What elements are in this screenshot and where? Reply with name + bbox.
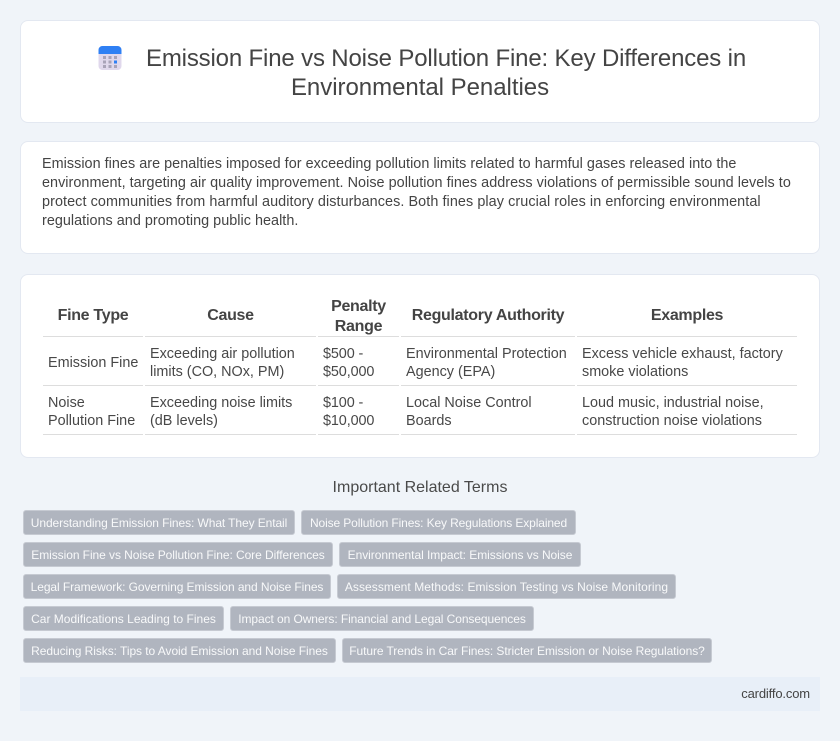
row: noise pollution fine <box>48 395 764 429</box>
comparison table <box>43 298 797 435</box>
row: emission fine: $500 - <box>323 346 363 362</box>
row: noise pollution fine: Exceeding noise limits <box>150 395 292 411</box>
icon: calendar <box>98 46 122 70</box>
header: fine type: Fine Type <box>58 307 128 324</box>
header: regulatory authority: Regulatory Authority <box>412 307 564 324</box>
row: noise pollution fine: Boards <box>406 413 452 429</box>
tag <box>23 510 295 535</box>
row: emission fine: Exceeding air pollution <box>150 346 295 362</box>
description text: environment, targeting air quality improvement. Noise pollution fines address violations of permissible sound levels to <box>42 175 791 191</box>
tag <box>337 574 676 599</box>
row: emission fine: Environmental Protection <box>406 346 567 362</box>
row: noise pollution fine: (dB levels) <box>150 413 218 429</box>
tag <box>230 606 534 631</box>
panel: comparison table <box>20 274 820 458</box>
tag: Impact on Owners: Financial and Legal Consequences <box>238 612 526 626</box>
row: emission fine <box>48 346 783 380</box>
row: emission fine: Excess vehicle exhaust, factory <box>582 346 783 362</box>
row: noise pollution fine: Noise <box>48 395 85 411</box>
tag: Legal Framework: Governing Emission and Noise Fines <box>31 580 323 594</box>
header: examples: Examples <box>651 307 723 324</box>
row: noise pollution fine: Pollution Fine <box>48 413 135 429</box>
tag <box>339 542 581 567</box>
row: emission fine: limits (CO, NOx, PM) <box>150 364 284 380</box>
row: emission fine: Emission Fine <box>48 355 138 371</box>
tag: Environmental Impact: Emissions vs Noise <box>348 548 572 562</box>
header: penalty range: Range <box>335 318 382 334</box>
tag: Emission Fine vs Noise Pollution Fine: Core Differences <box>31 548 325 562</box>
tag <box>23 574 331 599</box>
tag: Assessment Methods: Emission Testing vs Noise Monitoring <box>345 580 668 594</box>
row: emission fine: smoke violations <box>582 364 688 380</box>
row: noise pollution fine: Local Noise Control <box>406 395 532 411</box>
heading: related terms: Important Related Terms <box>333 479 507 496</box>
panel: title header <box>20 20 820 123</box>
tag: Future Trends in Car Fines: Stricter Emission or Noise Regulations? <box>349 644 705 658</box>
footer bar <box>20 677 820 711</box>
row: noise pollution fine: Loud music, industrial noise, <box>582 395 764 411</box>
row: emission fine: Agency (EPA) <box>406 364 495 380</box>
description text: regulations and promoting public health. <box>42 213 298 229</box>
description text: Emission fines are penalties imposed for exceeding pollution limits related to harmful gases released into the <box>42 156 736 172</box>
footer source: cardiffo.com <box>741 686 810 701</box>
row: emission fine: $50,000 <box>323 364 374 380</box>
panel: description <box>20 141 820 254</box>
tag <box>301 510 576 535</box>
header: penalty range: Penalty <box>331 298 386 315</box>
description text: protect communities from harmful auditory disturbances. Both fines play crucial roles in enforcing environmental <box>42 194 761 210</box>
tag: Understanding Emission Fines: What They Entail <box>31 516 287 530</box>
row: noise pollution fine: $10,000 <box>323 413 374 429</box>
tag <box>23 542 333 567</box>
title: Emission Fine vs Noise Pollution Fine: Key Differences in <box>146 45 746 72</box>
tag: Reducing Risks: Tips to Avoid Emission and Noise Fines <box>31 644 328 658</box>
header: cause: Cause <box>207 307 254 324</box>
description text <box>42 156 791 229</box>
tag: Car Modifications Leading to Fines <box>31 612 216 626</box>
row: noise pollution fine: $100 - <box>323 395 363 411</box>
tag list: related terms <box>23 510 712 663</box>
tag: Noise Pollution Fines: Key Regulations Explained <box>310 516 567 530</box>
tag <box>23 606 224 631</box>
tag <box>342 638 712 663</box>
row: noise pollution fine: construction noise violations <box>582 413 762 429</box>
header: penalty range <box>331 298 386 334</box>
title second line: Environmental Penalties <box>291 74 549 101</box>
tag <box>23 638 336 663</box>
